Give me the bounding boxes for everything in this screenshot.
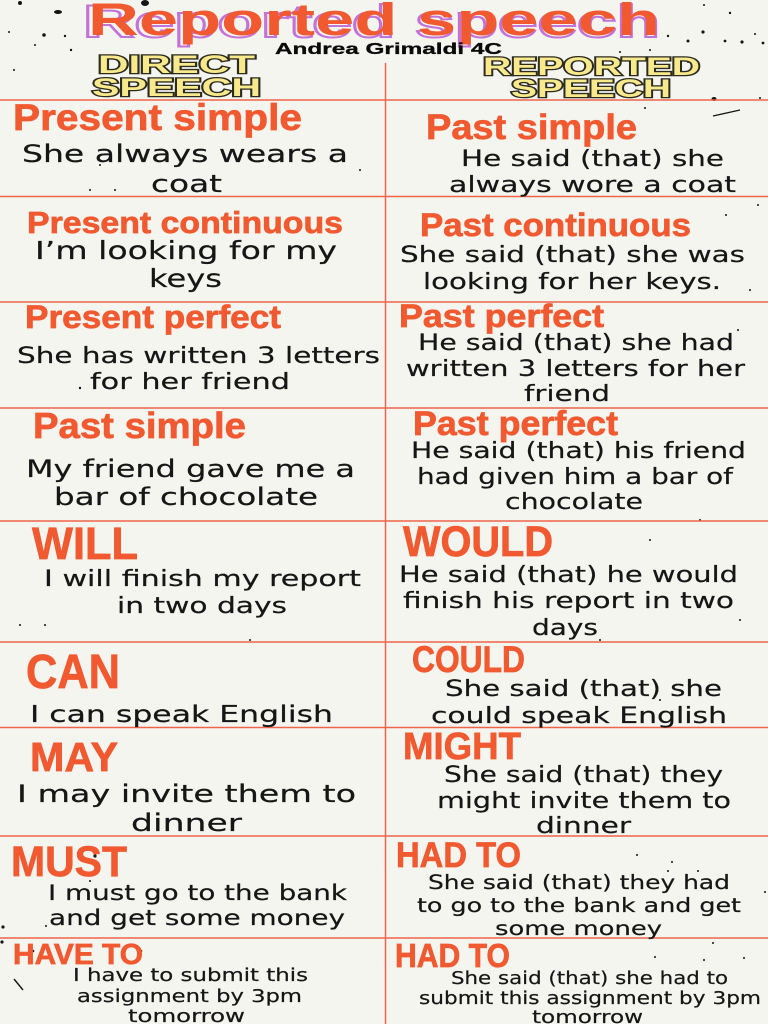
reported: past perfect: He said (that) his friend [411,439,746,464]
reported: past perfect: friend [524,382,610,407]
heading: reported speech: SPEECH [511,75,671,103]
reported: had to: to go to the bank and get [417,894,741,917]
direct: will: I will finish my report [44,567,361,592]
reported: past continuous [400,207,745,295]
direct: have to [13,939,308,1024]
direct: present simple: She always wears a [22,140,348,168]
heading: reported speech [483,53,700,103]
heading: direct speech: DIRECT [98,51,255,79]
direct: may: dinner [131,809,242,837]
reported: past perfect [399,298,746,407]
reported: would: finish his report in two [403,589,734,614]
reported: past continuous: She said (that) she was [400,243,745,268]
direct: can: I can speak English [30,702,333,728]
reported: might: might invite them to [437,789,731,814]
reported: had to [396,836,741,940]
direct: must: and get some money [49,906,345,930]
reported: would: days [532,616,598,641]
reported: could: She said (that) she [445,677,722,702]
direct: will: in two days [117,594,287,619]
direct: can [26,646,333,728]
reported: had to, final row: HAD TO [395,937,510,974]
reported: past perfect: Past perfect [413,405,618,443]
reported: might [403,726,731,839]
heading: direct speech: SPEECH [92,74,261,102]
direct: present simple: coat [151,170,222,198]
reported: could: could speak English [431,704,727,729]
reported: had to: She said (that) they had [428,871,730,894]
reported: had to, final row: She said (that) she had to [451,968,728,989]
reported: might: She said (that) they [444,763,723,788]
direct: present continuous: Present continuous [27,205,343,240]
direct: must: MUST [11,838,127,886]
direct: must [11,838,348,930]
reported: might: dinner [536,814,632,839]
direct: present continuous: keys [149,264,222,293]
direct: past simple [26,405,355,511]
reported: had to, final row: submit this assignment by 3pm [419,988,761,1009]
direct: will [32,518,361,619]
reported: past continuous: looking for her keys. [423,270,721,295]
direct: present continuous [27,205,343,293]
reported: past perfect: written 3 letters for her [406,357,746,382]
reported: could: COULD [412,639,525,680]
reported: had to: HAD TO [396,836,521,875]
reported: past perfect: He said (that) she had [418,331,734,356]
direct: may: I may invite them to [17,780,356,808]
reported: past simple: He said (that) she [461,147,724,172]
direct: can: CAN [26,646,120,699]
direct: present simple [13,97,348,198]
reported: past simple [426,108,736,198]
heading: direct speech [92,51,261,102]
direct: present perfect: Present perfect [25,299,281,335]
reported: would [399,518,738,641]
direct: present continuous: I’m looking for my [35,236,337,265]
reported: might: MIGHT [403,726,521,768]
reported: past perfect [411,405,746,515]
reported: could [412,639,727,729]
direct: have to: I have to submit this [73,965,308,986]
direct: must: I must go to the bank [48,881,348,905]
direct: past simple: bar of chocolate [54,483,318,511]
direct: have to: HAVE TO [13,939,143,971]
direct: present perfect [17,299,380,395]
reported: had to, final row [395,937,761,1024]
direct: have to: assignment by 3pm [77,986,302,1007]
author name: Andrea Grimaldi 4C [275,41,502,58]
reported: past perfect: Past perfect [399,298,604,334]
heading: reported speech: REPORTED [483,53,700,81]
reported: would: WOULD [403,518,553,566]
direct: may: MAY [30,734,118,780]
title [83,0,660,47]
reported: had to: some money [495,917,662,940]
reported: past simple: always wore a coat [449,173,736,198]
direct: past simple: Past simple [33,405,246,446]
direct: past simple: My friend gave me a [26,455,355,483]
reported: would: He said (that) he would [399,563,738,588]
reported: past perfect: chocolate [505,490,643,515]
direct: present simple: Present simple [13,97,302,138]
direct: present perfect: for her friend [90,370,290,395]
reported: past perfect: had given him a bar of [417,465,735,490]
direct: will: WILL [32,518,138,569]
direct: may [17,734,356,837]
reported: past continuous: Past continuous [420,207,691,243]
reported: past simple: Past simple [426,108,637,147]
direct: present perfect: She has written 3 letters [17,344,380,369]
